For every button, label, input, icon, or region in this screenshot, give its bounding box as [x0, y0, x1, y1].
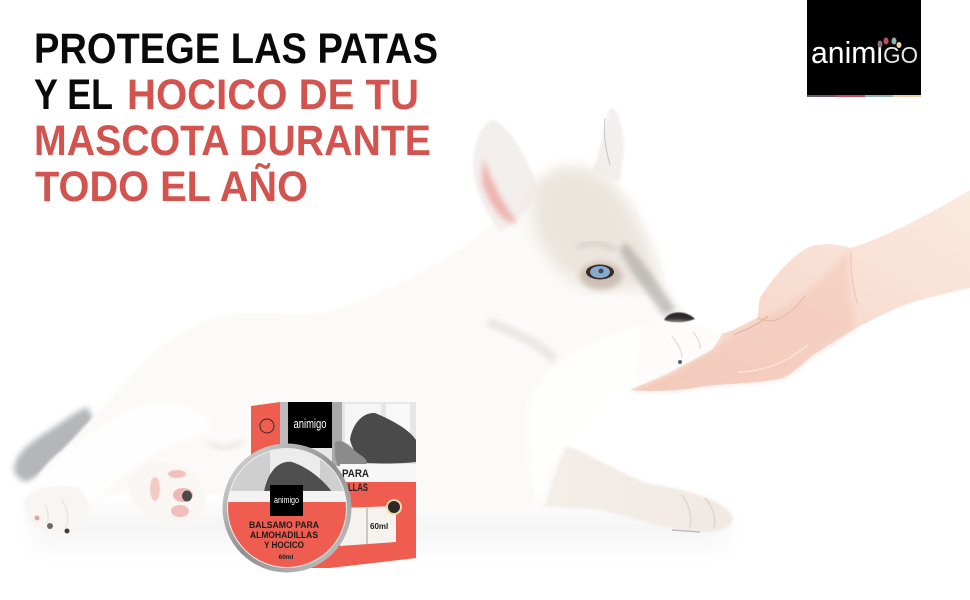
back paw pads — [128, 462, 204, 525]
tail — [14, 407, 105, 482]
box front — [280, 402, 416, 568]
box emblem — [260, 419, 274, 433]
front paw edge — [636, 323, 720, 385]
brow grey — [578, 243, 615, 250]
box label — [340, 506, 396, 546]
ear left — [473, 120, 537, 231]
hind upper leg — [28, 403, 210, 505]
tin logo — [270, 485, 303, 516]
photo: hand and forearm — [630, 190, 970, 391]
title: PROTEGE LAS PATAS — [34, 25, 438, 73]
ear right — [592, 107, 624, 182]
product: round tin: Y HOCICO — [264, 540, 304, 551]
front leg — [528, 322, 720, 506]
product: box: LLAS — [348, 482, 368, 494]
box seal — [387, 500, 401, 514]
product: box: 60ml — [370, 522, 388, 531]
nose — [664, 312, 695, 323]
photo: puppy — [14, 107, 733, 534]
logo: animigo — [807, 0, 921, 97]
box photo — [312, 402, 416, 464]
ear inner pink — [482, 158, 517, 222]
box text: PARA — [342, 468, 369, 480]
floor reflection — [30, 510, 730, 546]
tin text: BALSAMO PARA — [249, 520, 319, 531]
hind paw right toes — [682, 495, 715, 528]
white cheek — [527, 290, 660, 345]
title: HOCICO DE TU — [127, 71, 419, 119]
box photo cat — [335, 441, 367, 466]
box white band — [340, 464, 416, 482]
product: round tin: 60ml — [279, 554, 294, 561]
snout grey stripe — [620, 242, 676, 316]
product: box: animigo — [294, 416, 326, 431]
eye mark — [580, 262, 622, 290]
head cream — [532, 167, 660, 289]
product: round tin: animigo — [274, 495, 299, 505]
box logo — [288, 402, 332, 448]
box photo dog — [350, 413, 416, 464]
chest shading — [488, 322, 555, 360]
logo: animigo: animiGO — [811, 35, 918, 70]
product: round tin — [222, 444, 352, 572]
title — [34, 25, 438, 211]
box red panel — [311, 482, 416, 568]
hind right leg cream — [540, 440, 733, 532]
icon: paw dots — [878, 38, 902, 48]
front claw — [678, 360, 682, 364]
eye — [586, 264, 614, 280]
tin photo — [230, 452, 344, 491]
title: Y EL — [34, 71, 113, 119]
back paw left — [23, 486, 88, 534]
front paw toes — [672, 332, 700, 358]
box left face — [251, 402, 280, 470]
product: box — [251, 402, 416, 570]
title: TODO EL AÑO — [35, 163, 308, 211]
puppy body silhouette — [24, 164, 690, 533]
product: round tin: ALMOHADILLAS — [250, 530, 318, 541]
thigh fold — [208, 440, 242, 448]
title: MASCOTA DURANTE — [34, 117, 431, 165]
